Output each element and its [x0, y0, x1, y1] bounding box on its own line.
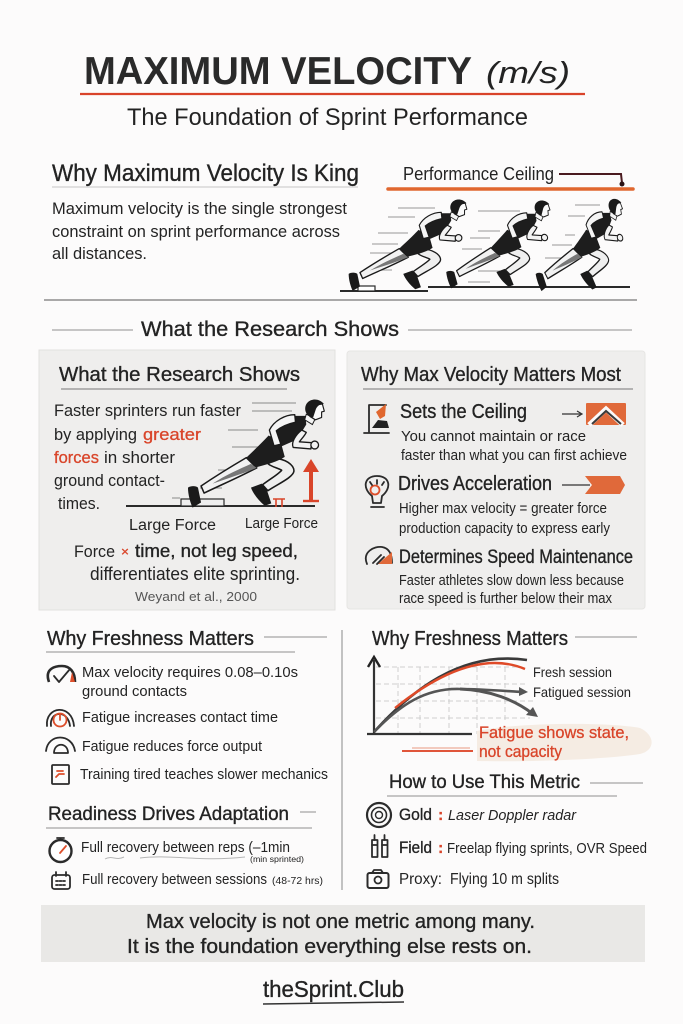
research text: Faster sprinters run faster — [54, 401, 241, 420]
icon: gauge check — [48, 666, 75, 682]
item: sets the ceiling: Sets the Ceiling — [400, 401, 527, 423]
research text: ground contact- — [54, 471, 165, 490]
section: how to use this metric — [367, 772, 647, 888]
heading: why freshness matters chart: Why Freshness Matters — [372, 628, 568, 650]
section: readiness drives adaptation — [46, 803, 323, 889]
column divider — [341, 630, 343, 890]
item: field: Freelap flying sprints, OVR Speed — [447, 840, 647, 857]
item: determines speed maintenance: Faster athletes slow down less because — [399, 573, 624, 589]
item: drives acceleration: Drives Acceleration — [398, 473, 552, 495]
performance ceiling label — [388, 164, 633, 189]
icon: calendar — [52, 872, 70, 889]
item: proxy: Flying 10 m splits — [450, 871, 559, 888]
icon: ceiling board — [364, 404, 389, 433]
key takeaway — [74, 541, 300, 584]
icon: gauge bulb — [366, 476, 388, 507]
panel: what the research shows — [39, 350, 335, 610]
item: field — [372, 835, 647, 857]
item: determines speed maintenance: Determines Speed Maintenance — [399, 547, 633, 568]
key takeaway: × — [121, 544, 129, 559]
item: determines speed maintenance: race speed is further below their max — [399, 591, 613, 607]
subtitle: The Foundation of Sprint Performance — [127, 104, 528, 131]
list item: ground contacts: Max velocity requires 0.08–0.10s — [82, 665, 298, 681]
callout: fatigue shows state — [402, 723, 652, 761]
list item: mechanics: Training tired teaches slower mechanics — [80, 767, 328, 783]
heading: why maximum velocity is king: Why Maximum Velocity Is King — [52, 160, 359, 187]
research text — [54, 401, 241, 513]
section: why freshness matters list — [46, 627, 328, 784]
arrow and ceiling graphic — [562, 403, 626, 425]
heading: Why Freshness Matters — [47, 627, 254, 650]
item: sets the ceiling — [364, 401, 627, 464]
intro text: Maximum velocity is the single strongest — [52, 199, 347, 218]
chart label: fresh: Fresh session — [533, 664, 612, 680]
title: (m/s) — [486, 55, 570, 90]
force labels: Large Force — [245, 516, 318, 532]
item: proxy — [368, 870, 559, 888]
research text: forces — [54, 448, 99, 467]
item: field: Field — [399, 838, 432, 857]
force labels: Large Force — [129, 517, 216, 534]
divider — [44, 299, 637, 301]
citation: Weyand et al., 2000 — [135, 590, 257, 604]
list item: recovery between reps: (min sprinted) — [250, 855, 304, 864]
research text: by applying — [54, 425, 137, 444]
item: gold: Gold — [399, 805, 432, 824]
footer brand: theSprint.Club — [263, 976, 404, 1002]
item: proxy: Proxy: — [399, 871, 442, 888]
icon: radar rings — [367, 803, 391, 827]
line chart: fresh vs fatigued — [367, 657, 631, 735]
panel heading: Why Max Velocity Matters Most — [361, 364, 621, 386]
item: drives acceleration: Higher max velocity = greater force — [399, 501, 607, 517]
icon: concentric dial — [47, 710, 74, 726]
item: sets the ceiling: faster than what you can first achieve — [401, 448, 627, 464]
icon: timing gates — [372, 835, 388, 857]
arrow: acceleration — [562, 476, 625, 494]
item: drives acceleration: production capacity to express early — [399, 521, 611, 537]
research text: times. — [58, 494, 100, 513]
list item: recovery between reps: Full recovery between reps (–1min — [81, 840, 290, 856]
item: drives acceleration — [366, 473, 625, 537]
heading: How to Use This Metric — [389, 772, 580, 793]
intro text: all distances. — [52, 244, 147, 263]
banner: conclusion: It is the foundation everything else rests on. — [127, 936, 532, 958]
title: MAXIMUM VELOCITY — [84, 50, 472, 93]
list item: force output: Fatigue reduces force output — [82, 739, 262, 755]
panel heading: What the Research Shows — [59, 363, 300, 386]
heading — [387, 772, 643, 796]
item: gold: Laser Doppler radar — [448, 807, 577, 824]
intro text: constraint on sprint performance across — [52, 222, 340, 241]
illustration: sprinter leaving blocks — [126, 400, 324, 508]
research text: in shorter — [104, 448, 175, 467]
icon: clipboard — [52, 765, 69, 784]
chart label: fatigued: Fatigued session — [533, 684, 631, 700]
callout: fatigue shows state: Fatigue shows state, — [479, 723, 629, 742]
heading: Readiness Drives Adaptation — [48, 803, 289, 825]
list item: recovery between reps — [50, 838, 304, 864]
item: determines speed maintenance — [366, 547, 633, 607]
item: gold: : — [438, 807, 443, 824]
key takeaway: differentiates elite sprinting. — [90, 564, 300, 584]
icon: stopwatch — [50, 838, 72, 862]
force labels — [129, 516, 318, 534]
research text: greater — [143, 425, 201, 444]
item: field: : — [438, 840, 443, 857]
list item: recovery between sessions: (48-72 hrs) — [272, 875, 323, 887]
key takeaway: Force — [74, 542, 115, 561]
performance ceiling label: Performance Ceiling — [403, 164, 554, 184]
icon: camera — [368, 870, 388, 888]
list item: ground contacts — [48, 665, 298, 700]
item: gold — [367, 803, 577, 827]
banner: conclusion: Max velocity is not one metric among many. — [146, 910, 535, 933]
panel: why max velocity matters most — [347, 351, 645, 609]
banner: conclusion — [41, 905, 645, 962]
list item: ground contacts: ground contacts — [82, 684, 187, 700]
icon: speedometer — [366, 547, 392, 564]
callout: fatigue shows state: not capacity — [479, 742, 562, 761]
icon: half gauge — [46, 738, 75, 753]
list item: recovery between sessions: Full recovery between sessions — [82, 872, 267, 888]
item: sets the ceiling: You cannot maintain or race — [401, 429, 586, 445]
key takeaway: time, not leg speed, — [135, 541, 298, 561]
section heading: what the research shows: What the Research Shows — [141, 317, 399, 341]
illustration: three sprinters — [340, 199, 635, 291]
intro text — [52, 199, 347, 263]
list item: contact time: Fatigue increases contact time — [82, 710, 278, 726]
